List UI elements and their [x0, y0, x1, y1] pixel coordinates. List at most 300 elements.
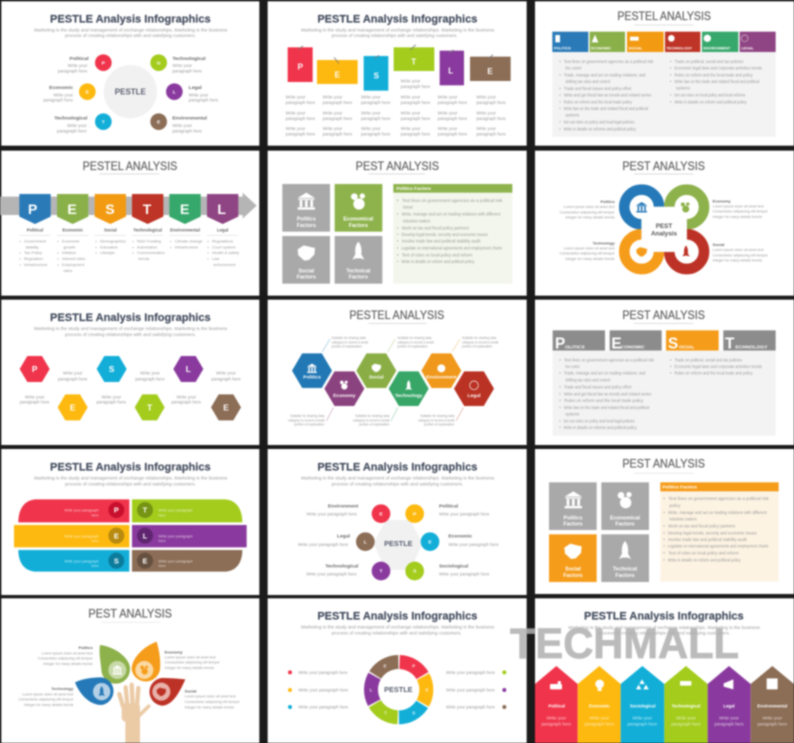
bar captions: here	[91, 513, 99, 517]
factor tiles: Technical	[346, 268, 371, 274]
callout text: Suitable for sharing data	[462, 336, 496, 340]
labels left: paragraph here	[57, 128, 87, 133]
callout text: category to record a small	[462, 340, 499, 344]
intro text: Marketing is the study and management of exchange relationships. Marketing is the business	[568, 625, 760, 630]
hexagons: E	[223, 402, 229, 412]
sticky notes: P	[298, 62, 304, 71]
title: PESTLE Analysis Infographics	[50, 461, 211, 473]
note text: Write your	[361, 95, 381, 100]
note text: Write your	[438, 126, 458, 131]
hexagons	[20, 356, 241, 420]
note text: Write your	[476, 111, 497, 116]
intro text: Marketing is the study and management of exchange relationships. Marketing is the business	[34, 475, 227, 480]
bar badges: E	[114, 531, 119, 540]
heading: PEST ANALYSIS	[622, 159, 705, 173]
column headings: Technological	[133, 228, 162, 233]
note text: Write your	[401, 111, 421, 116]
callout text: Suitable for sharing data	[397, 336, 432, 340]
letter circles: P	[413, 511, 417, 517]
panel: PESTEL table	[535, 1, 794, 146]
centre square	[630, 195, 699, 264]
bar captions: Write your paragraph	[158, 534, 193, 538]
centre circle: PESTLE	[115, 88, 147, 97]
letter circles: E	[86, 89, 90, 95]
bullet lists: rates	[63, 268, 72, 273]
detail box: • Text lines on government agencies as a political risk	[663, 496, 769, 501]
panel: PEST letters table	[535, 300, 794, 445]
sticky notes	[288, 47, 511, 91]
callout text: portion of explanation	[359, 423, 390, 427]
leader lines	[322, 339, 463, 421]
note text: Write your	[438, 95, 458, 100]
hexagon captions: Write your	[177, 394, 197, 399]
labels right	[439, 504, 499, 577]
letter tabs: L	[217, 201, 226, 217]
letter circles	[79, 54, 183, 130]
callout text: Suitable for sharing data	[420, 414, 455, 418]
bullet list box: • Trade, manage and act on trading relations, and	[559, 371, 646, 376]
factor tiles: Factors	[563, 573, 583, 579]
note text: paragraph here	[323, 131, 353, 136]
column headings: Environmental	[170, 228, 200, 233]
bullet list box: systems	[565, 412, 579, 417]
coloured headers	[552, 32, 776, 52]
bullet list box: • Text lines on government agencies as a political risk	[559, 59, 654, 64]
side text right: Integer for many details trends	[713, 259, 762, 263]
hexagon labels: Social	[369, 375, 384, 381]
note clips	[298, 45, 493, 63]
hexagon captions: paragraph here	[211, 376, 241, 381]
letter headers: OCIAL	[679, 345, 695, 351]
side text left: Integer for many details trends	[565, 216, 615, 220]
hexagon captions: Write your	[63, 371, 83, 376]
hexagon labels	[303, 375, 481, 399]
bar captions: here	[91, 564, 99, 568]
callout text: category to record a small	[397, 340, 434, 344]
detail box: • Text lines on government agencies as a political risk	[397, 198, 503, 203]
bullet list box: • Economic legal laws and corporate activities trends	[670, 364, 762, 369]
side text left	[560, 199, 615, 261]
note text: paragraph here	[401, 131, 431, 136]
column labels: Sociological	[630, 704, 655, 709]
labels right: Economic	[448, 534, 472, 540]
bullet list box: shifting tax rules and control	[565, 378, 610, 383]
bullet lists: • Law	[207, 256, 219, 261]
note text: paragraph here	[401, 100, 431, 105]
heading: PEST ANALYSIS	[356, 159, 439, 173]
bullet lists: • Automation	[132, 244, 157, 249]
labels left: Write your	[67, 123, 87, 128]
detail box: • Work on tax and fiscal policy partners	[663, 524, 735, 529]
column icons	[550, 678, 778, 691]
legend right: Write your paragraph here	[446, 670, 496, 675]
labels left: Legal	[337, 534, 351, 540]
bullet list box: • Write in details on reforms and political policy	[559, 425, 637, 430]
bullet list box	[552, 52, 776, 137]
side text left: Lorem ipsum dolor sit amet text	[22, 692, 73, 696]
letter tabs: S	[105, 201, 115, 217]
panel: PESTLE arrow columns	[535, 598, 794, 743]
coloured headers: ECONOMIC	[591, 46, 611, 50]
bullet list box: • Trade and fiscal issues and policy effort	[559, 86, 632, 91]
bar captions: Write your paragraph	[64, 509, 99, 513]
side text left: Consectetur adipiscing elit tempor	[38, 657, 93, 661]
heading: PESTEL ANALYSIS	[617, 9, 711, 23]
heading: PESTEL ANALYSIS	[83, 159, 177, 173]
column text: Write your	[676, 716, 696, 721]
labels left: Write your paragraph here	[306, 572, 357, 577]
factor tiles: Factors	[615, 573, 635, 579]
labels left: Write your paragraph here	[298, 542, 349, 547]
bullet list box	[553, 351, 776, 436]
panel: PESTLE rounded bars	[1, 449, 259, 595]
letter headers: S	[668, 336, 678, 353]
side text left: Integer for many details trends	[24, 703, 73, 707]
bullet lists: • Education	[95, 244, 118, 249]
side text left	[18, 645, 93, 707]
sticky notes: E	[487, 67, 493, 76]
bar captions: here	[158, 564, 166, 568]
bullet lists: • Regulations	[207, 238, 233, 243]
bar badges: T	[143, 506, 148, 515]
letter circles: T	[102, 119, 105, 125]
callout text: Suitable for sharing data	[290, 414, 325, 418]
bar captions: Write your paragraph	[64, 534, 99, 538]
bullet lists: • Government	[19, 238, 47, 243]
bar badges: L	[143, 531, 148, 540]
labels left: Technological	[325, 563, 359, 569]
column labels: Environmental	[757, 704, 787, 709]
sticky notes: L	[448, 66, 453, 75]
coloured headers: POLITICS	[554, 46, 571, 50]
labels right: Legal	[189, 85, 202, 91]
detail box: • Legislate on international agreements and employment charts	[663, 544, 768, 549]
note text: Write your	[401, 126, 421, 131]
hexagon captions: Write your	[102, 394, 122, 399]
note text: Write your	[286, 95, 306, 100]
detail box: • Text of rules on local policy and reform	[397, 252, 473, 257]
intro text: Marketing is the study and management of exchange relationships. Marketing is the business	[301, 27, 494, 32]
column text: paragraph here	[758, 721, 788, 726]
detail box: policy	[669, 503, 681, 508]
letter circles: T	[379, 569, 383, 575]
hexagons: L	[186, 364, 191, 374]
letter tabs: E	[67, 201, 77, 217]
labels left: Technological	[54, 115, 88, 121]
factor tiles: Factors	[297, 223, 316, 229]
factor tiles: Economical	[343, 217, 374, 223]
intro text: process of creating relationships with and satisfying customers.	[332, 33, 458, 38]
labels right: Write your	[172, 63, 193, 68]
intro text: Marketing is the study and management of exchange relationships. Marketing is the business	[301, 624, 494, 629]
hexagon labels: Economy	[333, 393, 356, 399]
labels right: paragraph here	[172, 128, 203, 133]
side text right: Economy	[713, 198, 731, 203]
panel: PESTLE donut	[268, 598, 527, 743]
labels right: Write your paragraph here	[439, 572, 490, 577]
bar captions: Write your paragraph	[158, 509, 193, 513]
note text: Write your	[401, 95, 421, 100]
note text	[286, 79, 507, 136]
detail box: • Legislate on international agreements and employment charts	[397, 246, 502, 251]
callout text	[288, 336, 499, 427]
bullet lists: • Economic	[57, 238, 80, 243]
donut letters: E	[425, 687, 429, 692]
side text right: Social	[185, 688, 196, 693]
note text: paragraph here	[323, 116, 353, 121]
bar badges	[108, 502, 153, 569]
column labels: Legal	[723, 704, 735, 709]
side text right	[165, 649, 241, 709]
side text right: Lorem ipsum dolor sit amet text	[713, 204, 764, 208]
ring icons	[636, 202, 690, 257]
note text: Write your	[286, 126, 306, 131]
intro text	[301, 27, 494, 38]
column labels: Economic	[589, 704, 610, 709]
hexagon captions: paragraph here	[135, 376, 165, 381]
bar badges: P	[114, 506, 119, 515]
callout text: Suitable for sharing data	[332, 336, 366, 340]
panel: PEST squares green	[268, 151, 527, 296]
side text right: Consectetur adipiscing elit tempor	[713, 253, 769, 257]
hexagon captions	[20, 371, 241, 405]
column text: paragraph here	[671, 721, 701, 726]
panel: PESTLE hexagons	[1, 300, 259, 445]
labels left: Write your paragraph here	[307, 511, 358, 516]
labels left: paragraph here	[58, 69, 88, 74]
note text: paragraph here	[361, 100, 391, 105]
bullet lists: • Health & safety	[207, 250, 239, 255]
column text: paragraph here	[628, 721, 658, 726]
note text: paragraph here	[286, 100, 316, 105]
column text: Write your	[590, 716, 610, 721]
bullet list box: • Rules on reform and the local trade policy	[559, 398, 644, 403]
note text: Write your	[476, 126, 497, 131]
note text: Write your	[361, 111, 381, 116]
labels right	[172, 56, 219, 133]
column labels: Technological	[672, 704, 700, 709]
detail box: • Involve trade law and political stability audit	[397, 239, 481, 244]
column labels	[548, 704, 787, 709]
column headings: Legal	[217, 228, 228, 233]
detail box: Politics Factors	[396, 186, 431, 191]
factor tiles: Social	[565, 567, 581, 573]
bullet list box: free control	[565, 66, 581, 71]
column headings: Political	[27, 228, 43, 233]
arrow band	[0, 193, 257, 219]
detail box	[660, 482, 779, 582]
centre square: PEST	[656, 223, 672, 230]
column text	[542, 716, 788, 726]
bullet list box: systems	[676, 86, 690, 91]
intro text	[34, 326, 227, 337]
detail box: issue	[403, 205, 414, 210]
hexagon captions: paragraph here	[58, 376, 88, 381]
arrow columns	[535, 666, 794, 743]
column text: paragraph here	[585, 721, 615, 726]
labels right: Write your paragraph here	[439, 511, 490, 516]
note text: paragraph here	[361, 131, 391, 136]
callout text: portion of explanation	[294, 423, 325, 427]
intro text	[301, 624, 494, 635]
sticky notes: T	[411, 58, 416, 67]
bullet lists: • Employment	[57, 262, 85, 267]
bullet lists: • Court system	[207, 244, 236, 249]
note text: Write your	[323, 95, 343, 100]
labels left: Economic	[49, 85, 73, 91]
side text right: Integer for many details trends	[713, 215, 762, 219]
hub: PESTLE	[384, 539, 413, 548]
bullet list box: • Rules on reform and the local trade and policy	[670, 371, 753, 376]
bullet lists: • Inflation	[57, 250, 76, 255]
column text: Write your	[763, 716, 783, 721]
factor tiles: Factors	[349, 223, 368, 229]
note text: paragraph here	[476, 131, 507, 136]
bullet list box: • Write and get fiscal law as trends and related series	[559, 93, 651, 98]
note text: Write your	[438, 111, 458, 116]
bullet list box: • Set out rules on local policy and local reforms	[670, 93, 745, 98]
callout text: Suitable for sharing data	[355, 414, 390, 418]
side text left: Lorem ipsum dolor sit amet text	[42, 651, 93, 655]
side text right: Social	[713, 242, 724, 247]
honeycomb hexagons	[292, 353, 494, 406]
legend left	[288, 670, 349, 710]
side text right: Consectetur adipiscing elit tempor	[165, 661, 221, 665]
hexagon captions: Write your	[25, 394, 45, 399]
bullet list box: shifting tax rules and control	[565, 79, 610, 84]
letter circles: E	[157, 119, 161, 125]
column text: paragraph here	[714, 721, 744, 726]
hub	[373, 520, 423, 570]
note text: Write your	[323, 111, 343, 116]
hexagons: E	[70, 402, 76, 412]
labels right: Environmental	[172, 115, 208, 121]
bullet lists: • Demographics	[95, 238, 126, 243]
hexagon captions: Write your	[140, 371, 160, 376]
bullet lists	[19, 238, 239, 273]
panel: PESTEL arrow	[0, 151, 259, 296]
intro text: Marketing is the study and management of exchange relationships. Marketing is the business	[301, 475, 494, 480]
coloured headers: ENVIRONMENT	[703, 46, 731, 50]
column text: Write your	[633, 716, 653, 721]
letter headers: ECHNOLOGY	[735, 345, 768, 351]
callout text: portion of explanation	[332, 345, 362, 349]
side text left: Technology	[593, 241, 615, 246]
side text left: Lorem ipsum dolor sit amet text	[564, 205, 615, 209]
title: PESTLE Analysis Infographics	[584, 610, 744, 622]
labels right: Write your	[189, 92, 209, 97]
letter circles: G	[157, 60, 161, 66]
coloured headers: SOCIAL	[629, 46, 643, 50]
intro text	[34, 27, 227, 38]
detail box: industries matters	[669, 517, 697, 522]
labels left	[43, 56, 89, 133]
bar captions: Write your paragraph	[158, 559, 193, 563]
note text: paragraph here	[286, 116, 316, 121]
hexagons: S	[109, 364, 115, 374]
factor tiles: Social	[298, 268, 315, 274]
side text left: Integer for many details trends	[43, 662, 93, 666]
legend left: Write your paragraph here	[298, 688, 349, 693]
panel: PEST hand tree	[1, 598, 259, 743]
donut letters: S	[412, 711, 415, 716]
bullet list box: • Write in details on reforms and political policy	[559, 126, 637, 131]
centre circle	[104, 65, 157, 118]
side text left: Politics	[600, 199, 615, 204]
intro text: process of creating relationships with and satisfying customers.	[332, 481, 463, 486]
letter circles: L	[173, 89, 176, 95]
hexagon labels: Technology	[395, 393, 423, 399]
column text: Write your	[719, 716, 739, 721]
donut letters: T	[384, 711, 387, 716]
title: PESTLE Analysis Infographics	[50, 312, 211, 324]
title: PESTLE Analysis Infographics	[317, 610, 477, 622]
column text: paragraph here	[542, 721, 572, 726]
hexagon icons	[307, 364, 478, 390]
side text right: Lorem ipsum dolor sit amet text	[713, 248, 764, 252]
detail box: • Write in details on reform and political policy	[397, 259, 475, 264]
note text: paragraph here	[476, 116, 507, 121]
detail box: Politics Factors	[662, 485, 697, 490]
factor tiles: Economical	[610, 515, 640, 521]
leaves	[75, 642, 185, 706]
detail box: • Develop legal trends, security and economic issues	[397, 232, 488, 237]
side text left: Integer for many details trends	[565, 257, 615, 261]
heading: PEST ANALYSIS	[622, 457, 705, 471]
side text right: Economy	[165, 649, 183, 654]
detail box: • Write in details on reform and political policy	[663, 557, 741, 562]
side text right: Lorem ipsum dolor sit amet text	[165, 655, 216, 659]
bullet lists: • R&D Funding	[132, 238, 161, 243]
factor tiles: Factors	[297, 275, 316, 281]
letter circles: P	[102, 60, 106, 66]
bullet list box: • Set out rules on policy and local legal policies	[559, 419, 635, 424]
note text: paragraph here	[476, 100, 507, 105]
sticky notes: E	[335, 70, 341, 79]
panel: PESTLE sticky notes	[268, 1, 527, 146]
bar captions: here	[158, 513, 166, 517]
bullet list box: free control	[565, 364, 579, 369]
callout text: category to record a small	[332, 340, 368, 344]
detail box: • Write, manage and act on trading relations with different	[663, 510, 767, 515]
bullet list box: • Trade, manage and act on trading relations, and	[559, 72, 646, 77]
hexagon labels: Legal	[467, 393, 481, 399]
bar badges: E	[143, 556, 148, 565]
bullet list box: • Write law on the trade and related fiscal and political	[559, 106, 648, 111]
labels left: Write your	[53, 92, 74, 97]
bullet lists: stability	[25, 244, 39, 249]
intro text	[301, 475, 494, 486]
side text right	[713, 198, 769, 263]
title: PESTLE Analysis Infographics	[50, 14, 211, 26]
bullet lists: • Lifestyle	[95, 250, 115, 255]
detail box: • Involve trade law and political stability audit	[663, 537, 747, 542]
note text: paragraph here	[401, 84, 431, 89]
coloured headers: TECHNOLOGY	[666, 46, 693, 50]
bullet list box: • Text lines on government agencies as a political risk	[559, 357, 655, 362]
bullet lists: trends	[138, 256, 149, 261]
panel: PEST rings	[535, 151, 794, 296]
callout text: portion of explanation	[397, 345, 428, 349]
labels left: Write your	[68, 63, 88, 68]
labels left: Political	[70, 56, 89, 62]
donut letters: E	[383, 663, 387, 668]
side text right: Integer for many details trends	[165, 666, 214, 670]
hexagon captions: paragraph here	[97, 400, 127, 405]
factor tiles: Politics	[297, 217, 316, 223]
detail box: • Text of rules on local policy and reform	[663, 551, 739, 556]
note text: paragraph here	[438, 116, 468, 121]
